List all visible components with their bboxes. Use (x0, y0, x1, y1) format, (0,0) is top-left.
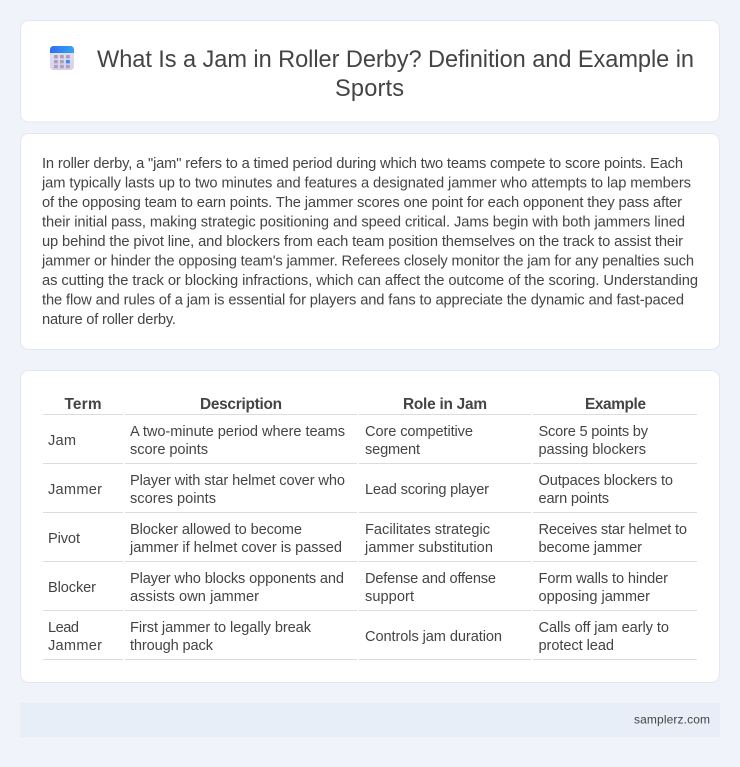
text block: definition paragraph: nature of roller derby. (42, 312, 176, 328)
table row: Jammer (48, 473, 673, 507)
table row: Jammer: Player with star helmet cover who (130, 473, 345, 489)
table row: Jam: Core competitive (365, 424, 473, 440)
panel: title card (20, 20, 720, 122)
table header (64, 396, 646, 413)
table row: Pivot: jammer substitution (364, 540, 493, 556)
table row: Lead Jammer (48, 620, 669, 654)
table row: Jam: segment (365, 442, 420, 458)
text block: definition paragraph: as cutting the track or blocking infractions, which can affect the outcome of the scoring. Understanding (42, 273, 698, 289)
table row: Lead Jammer: Lead (48, 620, 79, 636)
table row: Jam: Score 5 points by (538, 424, 649, 440)
table header: Description (200, 396, 282, 413)
table row: Lead Jammer: protect lead (538, 638, 614, 654)
heading: What Is a Jam in Roller Derby? Definition and Example in (97, 47, 694, 73)
table row: Jam: A two-minute period where teams (130, 424, 345, 440)
table row: Jammer: Jammer (48, 482, 102, 498)
table row: Blocker: assists own jammer (130, 589, 259, 605)
table header: Role in Jam (403, 396, 487, 413)
table row: Jammer: Outpaces blockers to (538, 473, 673, 489)
text block: definition paragraph: jammer or hinder the opposing team's jammer. Referees closely monitor the jam for any penalties such (41, 254, 694, 270)
table row: Lead Jammer: Jammer (48, 638, 102, 654)
table row: Blocker: Defense and offense (365, 571, 496, 587)
table row: Pivot: Blocker allowed to become (130, 522, 302, 538)
panel: terms table (20, 370, 720, 682)
table row: Pivot: Pivot (48, 531, 80, 547)
panel: explanation text (20, 134, 720, 350)
table row: Jammer: scores points (130, 491, 216, 507)
text block: definition paragraph: their initial pass, making strategic positioning and speed critical. Jams begin with both jammers lined (42, 214, 685, 230)
footer text: source: samplerz.com (634, 712, 710, 726)
table row: Lead Jammer: First jammer to legally break (130, 620, 312, 636)
table row: Pivot: become jammer (538, 540, 642, 556)
table row: Jam: Jam (48, 433, 76, 449)
table row: Blocker: Player who blocks opponents and (130, 571, 344, 587)
table row: Blocker: support (365, 589, 414, 605)
text block: definition paragraph: up behind the pivot line, and blockers from each team position themselves on the track to assist their (42, 234, 683, 250)
icon: calendar (50, 46, 74, 70)
table row: Blocker: opposing jammer (538, 589, 650, 605)
table row: Pivot: Facilitates strategic (365, 522, 490, 538)
table row: Pivot (48, 522, 687, 556)
text block: definition paragraph: the flow and rules of a jam is essential for players and fans to appreciate the dynamic and fast-paced (42, 292, 684, 308)
heading: Sports (335, 76, 404, 102)
table row: Blocker: Form walls to hinder (538, 571, 668, 587)
table row: Jammer: Lead scoring player (365, 482, 489, 498)
text block: definition paragraph: jam typically lasts up to two minutes and features a designated jammer who attempts to lap members (41, 176, 691, 192)
footer bar (20, 703, 720, 737)
table row: Blocker (48, 571, 668, 605)
table row: Jammer: earn points (538, 491, 609, 507)
table row: Blocker: Blocker (48, 580, 96, 596)
text block: definition paragraph (41, 156, 698, 328)
table row: Lead Jammer: through pack (130, 638, 214, 654)
text block: definition paragraph: In roller derby, a "jam" refers to a timed period during which two teams compete to score points. Each (42, 156, 683, 172)
table row: Jam: score points (130, 442, 208, 458)
text block: definition paragraph: of the opposing team to earn points. The jammer scores one point for each opponent they pass after (42, 195, 682, 211)
table header: Example (585, 396, 646, 413)
table row: Jam (48, 424, 649, 458)
table header: Term (64, 396, 102, 413)
table row: Lead Jammer: Calls off jam early to (538, 620, 669, 636)
heading (97, 47, 694, 102)
table row: Pivot: Receives star helmet to (538, 522, 687, 538)
table row: Pivot: jammer if helmet cover is passed (129, 540, 342, 556)
table row: Jam: passing blockers (538, 442, 646, 458)
table row: Lead Jammer: Controls jam duration (365, 629, 502, 645)
